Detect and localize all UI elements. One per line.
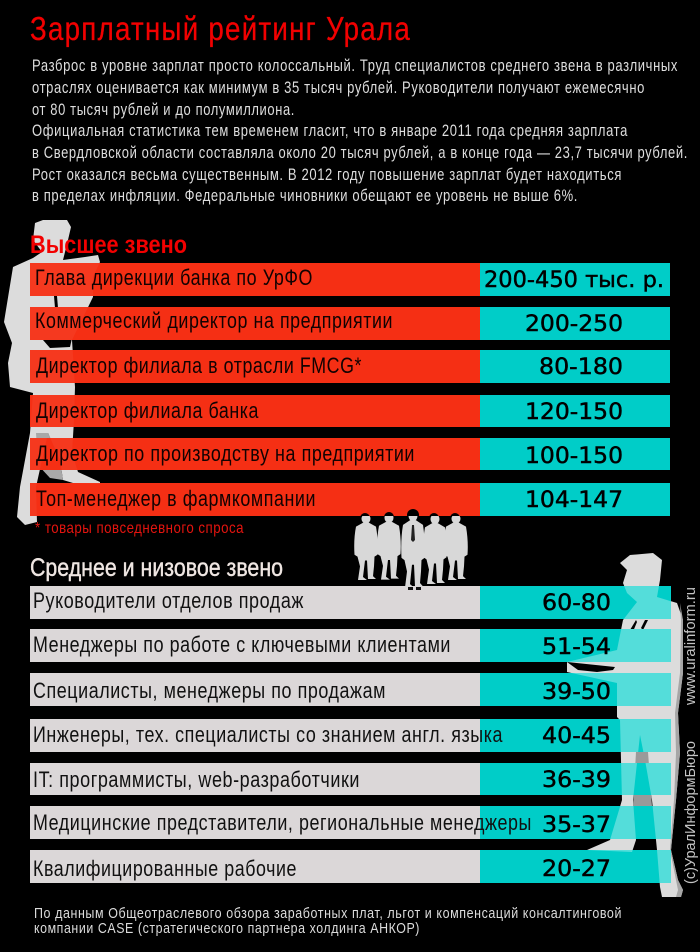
values: middle management: 40-45: [542, 724, 611, 749]
labels: middle management: IT: программисты, web-разработчики: [33, 767, 360, 792]
row: sales heads: [30, 586, 671, 619]
labels: top management: Директор по производству на предприятии: [36, 441, 415, 466]
row: bank branch director: [30, 395, 670, 427]
values: top management: 120-150: [525, 400, 623, 425]
row: skilled workers: [30, 850, 671, 883]
labels: top management: Директор филиала в отрасли FMCG*: [36, 353, 362, 378]
row: sales specialists: [30, 673, 671, 706]
labels: top management: Глава дирекции банка по УрФО: [35, 265, 313, 290]
row: IT: [30, 763, 671, 795]
labels: top management: [35, 265, 415, 511]
vertical credit: website: www.uralinform.ru: [682, 587, 699, 706]
labels: middle management: Специалисты, менеджеры по продажам: [33, 678, 386, 703]
source note: компании CASE (стратегического партнера холдинга АНКОР): [34, 920, 420, 937]
footnote: * товары повседневного спроса: [35, 520, 244, 537]
labels: middle management: [33, 588, 532, 881]
labels: top management: Директор филиала банка: [36, 398, 259, 423]
row: engineers: [30, 719, 671, 752]
row: key account managers: [30, 629, 671, 662]
silhouette: right businessman: [567, 553, 683, 897]
labels: top management: Топ-менеджер в фармкомпании: [36, 486, 316, 511]
values: middle management: 20-27: [542, 857, 611, 882]
title: Зарплатный рейтинг Урала: [30, 10, 411, 47]
values: middle management: 36-39: [542, 768, 611, 793]
values: middle management: 51-54: [542, 635, 611, 660]
icon: group of five people: [354, 509, 468, 590]
values: middle management: [542, 591, 611, 882]
labels: middle management: Квалифицированные рабочие: [33, 856, 297, 881]
source note: [34, 905, 622, 937]
panel: middle management table: [30, 586, 671, 883]
labels: top management: Коммерческий директор на предприятии: [35, 308, 393, 333]
values: middle management: 60-80: [542, 591, 611, 616]
panel: top management table: [30, 263, 670, 516]
silhouette: left businessman: [4, 220, 100, 525]
heading: top management: Высшее звено: [30, 231, 187, 259]
values: top management: 104-147: [525, 488, 623, 513]
translucent silhouettes over the bars: [30, 263, 671, 883]
row: medical reps: [30, 806, 671, 839]
values: top management: 200-250: [525, 312, 623, 337]
labels: middle management: Руководители отделов продаж: [33, 588, 304, 613]
values: top management: 100-150: [525, 444, 623, 469]
values: middle management: 35-37: [542, 813, 611, 838]
vertical credit: copyright: (с)УралИнформБюро: [682, 741, 699, 884]
intro text block: от 80 тысяч рублей и до полумиллиона.: [32, 101, 295, 119]
heading: middle management: Среднее и низовое звено: [30, 554, 283, 582]
intro text block: [32, 57, 688, 205]
row: commercial director: [30, 307, 670, 340]
values: top management: 200-450 тыс. р.: [484, 268, 664, 293]
row: FMCG branch director: [30, 350, 670, 383]
row: bank directorate head: [30, 263, 670, 296]
row: production director: [30, 438, 670, 470]
labels: middle management: Инженеры, тех. специалисты со знанием англ. языка: [33, 722, 503, 747]
values: top management: [484, 268, 664, 513]
values: top management: 80-180: [539, 355, 623, 380]
labels: middle management: Менеджеры по работе с ключевыми клиентами: [33, 632, 451, 657]
values: middle management: 39-50: [542, 680, 611, 705]
labels: middle management: Медицинские представители, региональные менеджеры: [33, 810, 532, 835]
row: pharma top manager: [30, 483, 670, 516]
